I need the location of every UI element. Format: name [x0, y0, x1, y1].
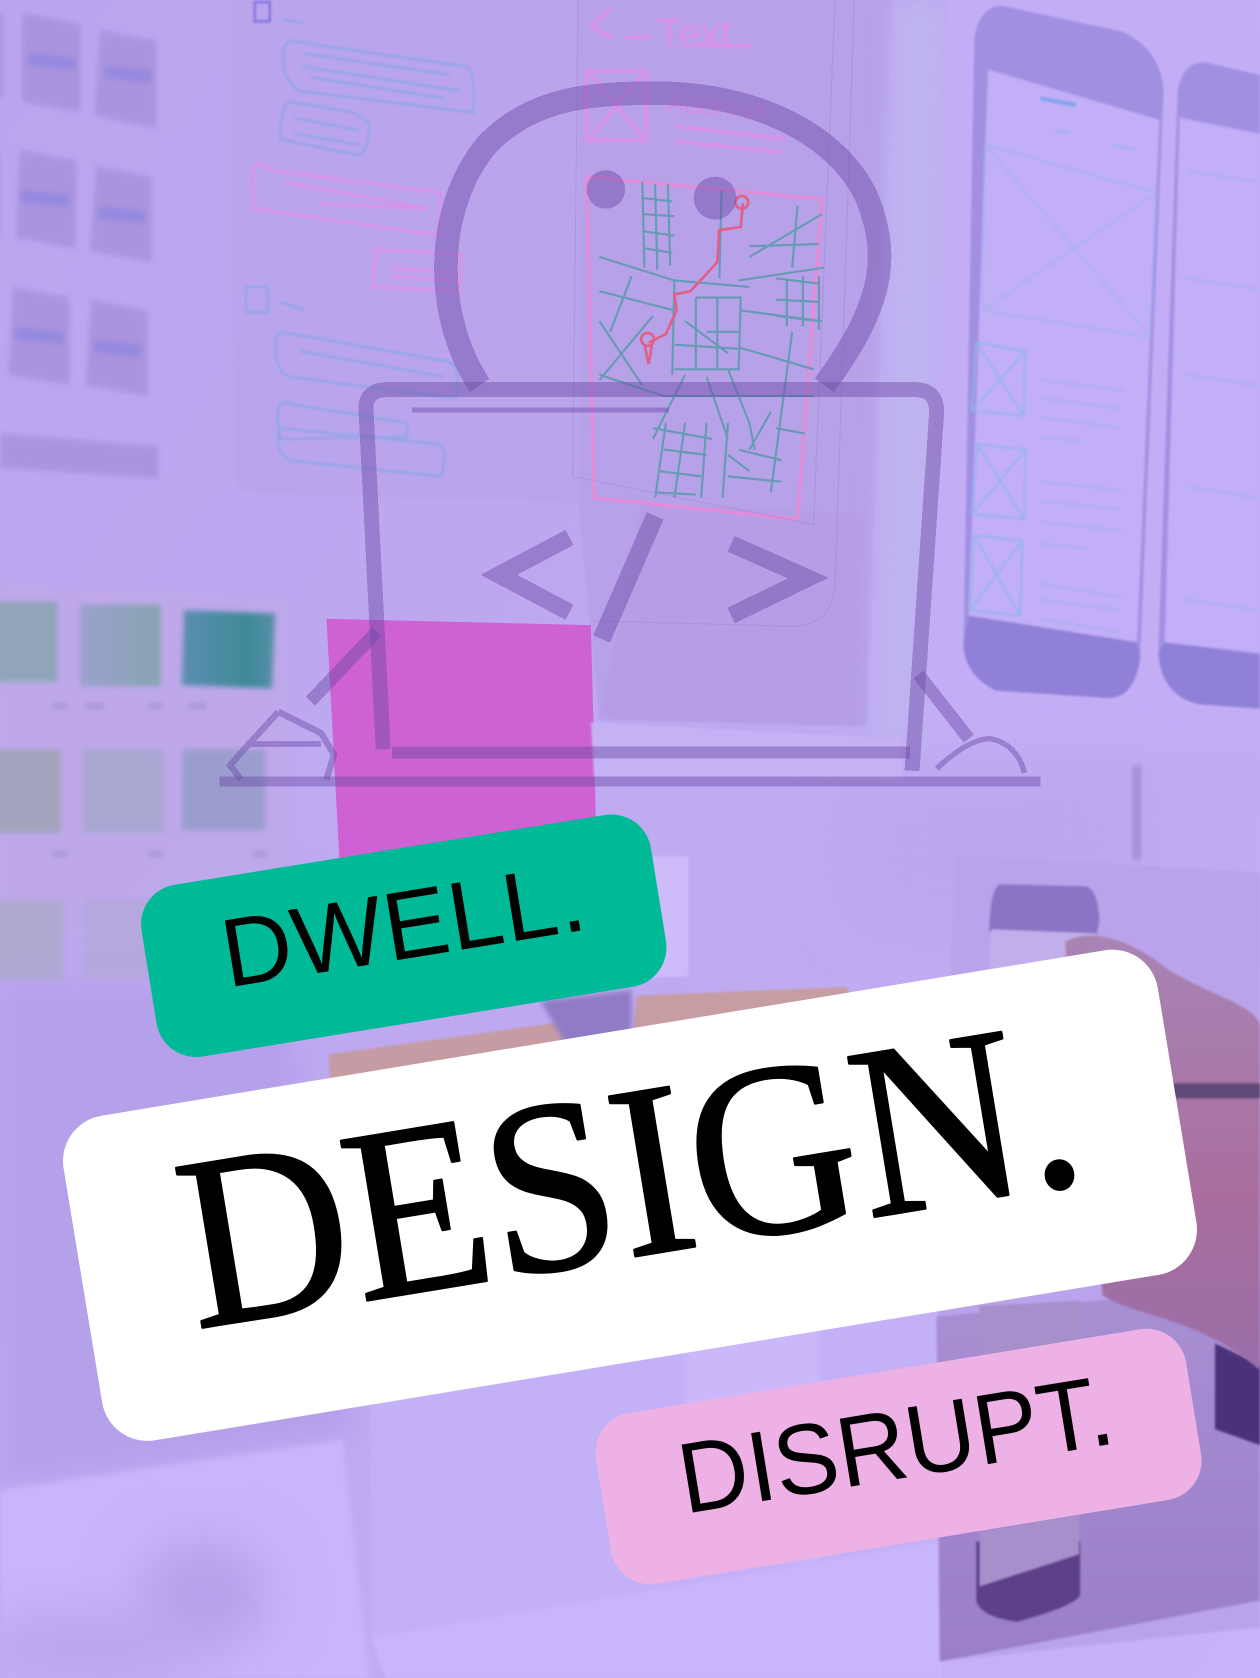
- label: design: DESIGN.: [160, 965, 1099, 1382]
- robot eyes: [587, 170, 737, 219]
- lower left tones: [0, 985, 353, 1483]
- robot outline: [219, 93, 1041, 781]
- pill: disrupt: [589, 1323, 1208, 1590]
- robot screen: [366, 390, 937, 771]
- right paper strip: [872, 0, 947, 771]
- robot arms and feet: [310, 632, 377, 701]
- faint frames: [573, 0, 854, 626]
- phone mockups: [963, 5, 1260, 709]
- map route: [641, 196, 748, 364]
- hand: [1065, 936, 1260, 1370]
- colour swatches: [0, 583, 289, 942]
- grey swatch grid: [0, 11, 158, 479]
- blue scribbles: [246, 2, 474, 476]
- wireframe heading: Text: [657, 10, 732, 56]
- label: dwell: DWELL.: [214, 842, 592, 1008]
- wireframe heading: [587, 9, 787, 152]
- pink scribbles: [252, 163, 461, 291]
- swatch labels: [14, 53, 153, 357]
- pill: dwell: [135, 809, 672, 1063]
- sticky notes orange: [329, 1020, 578, 1113]
- paper: right lower with phone: [937, 854, 1260, 1661]
- pill: design: [56, 943, 1204, 1448]
- robot head: [446, 93, 880, 385]
- wireframe heading: Address: [665, 86, 770, 126]
- pink sticky note: [327, 619, 597, 878]
- code brackets: [499, 537, 570, 612]
- sign post: [1133, 765, 1141, 860]
- map frame: [587, 177, 822, 519]
- phone wireframe lines: [970, 98, 1258, 632]
- paper: lower centre: [369, 1070, 942, 1638]
- phones lower: [989, 884, 1099, 936]
- lower wall: [284, 728, 1260, 980]
- map streets: [599, 182, 824, 498]
- label: disrupt: DISRUPT.: [670, 1354, 1121, 1535]
- paper sheet: wireframes: [230, 0, 578, 503]
